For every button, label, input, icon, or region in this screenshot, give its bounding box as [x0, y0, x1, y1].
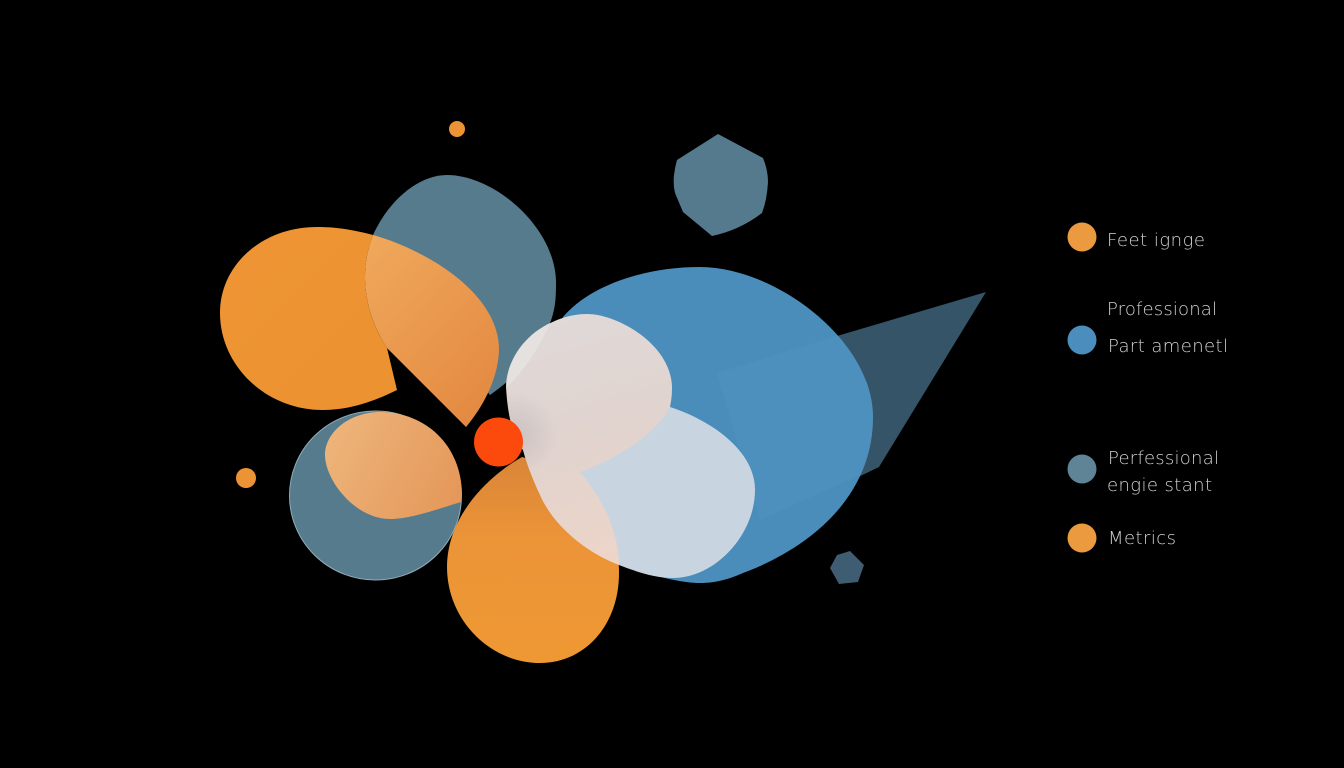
small dark hexagon — [830, 551, 864, 584]
legend item: Metrics — [1068, 524, 1176, 552]
shape: lower-left light orange petal — [325, 412, 462, 519]
shape: upper white petal with peach tail — [506, 314, 672, 565]
legend item: Professional Part amenetl: Professional — [1107, 299, 1217, 320]
teal hexagon top — [674, 134, 768, 236]
legend item: Metrics: Metrics — [1108, 528, 1176, 549]
legend item: Feet ignge — [1068, 222, 1205, 252]
legend item: Perfessional engie stant — [1068, 448, 1219, 496]
shape: lighter triangle overlap on blue — [838, 336, 873, 474]
shape: left orange petal — [220, 227, 397, 410]
shape: large blue blob — [530, 267, 873, 583]
shape: dark blue triangle — [820, 292, 986, 481]
legend — [1068, 222, 1228, 552]
shape: shaded area of white petal — [508, 408, 542, 458]
diagram: overlapping shapes — [220, 175, 986, 663]
central red circle — [474, 418, 523, 466]
shape: bottom orange petal — [447, 457, 619, 663]
shape: overlap of orange and teal petal — [365, 235, 499, 427]
shape: lower-left teal circle — [290, 411, 462, 580]
shape: top teal petal — [373, 175, 556, 395]
shape: lower white-blue petal — [580, 407, 755, 578]
legend item: Perfessional engie stant: Perfessional — [1108, 448, 1219, 469]
legend item: Feet ignge: Feet ignge — [1107, 230, 1205, 251]
legend item: Professional Part amenetl: Part amenetl — [1108, 336, 1228, 357]
legend item: Perfessional engie stant: engie stant — [1107, 475, 1212, 496]
small orange dot left — [236, 468, 256, 488]
shape: white and teal overlap — [507, 323, 550, 387]
legend item: Professional Part amenetl — [1068, 299, 1228, 357]
small orange dot top — [449, 121, 465, 137]
